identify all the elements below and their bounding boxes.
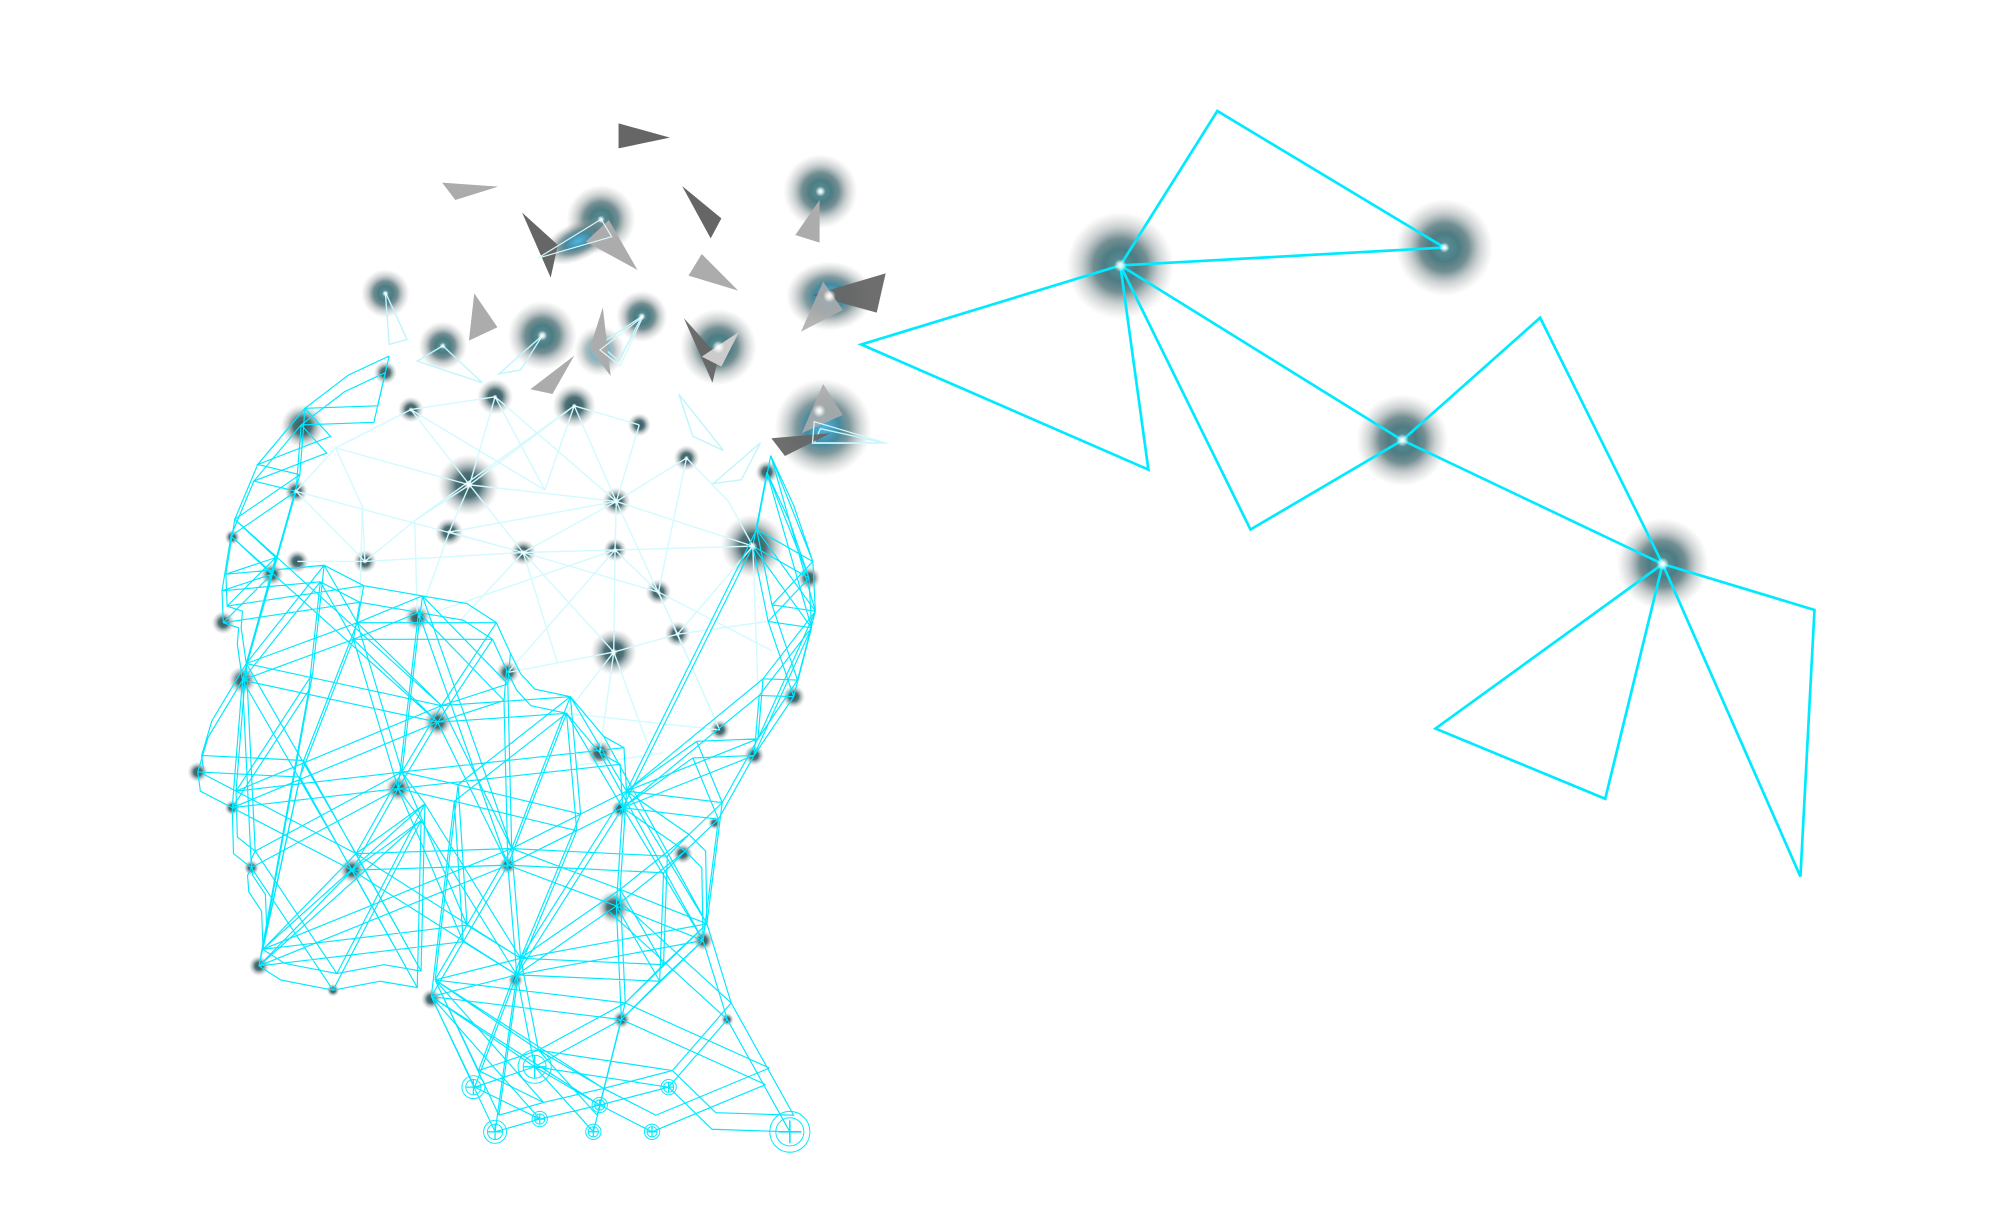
node sparks: [293, 394, 757, 656]
faint detached triangle outlines: [385, 292, 884, 484]
pale outlines over shards: [537, 219, 887, 443]
head wire mesh: upper copy: [202, 356, 815, 1115]
flying shards: [442, 123, 887, 456]
large glows above the head: [361, 154, 873, 476]
network triangles: [861, 111, 1814, 877]
head wire mesh: lower copy: [198, 373, 812, 1132]
glowing mesh nodes: [188, 361, 820, 1028]
screw rings along the neck: [462, 1050, 810, 1152]
network glows: [1067, 199, 1709, 610]
network sparks: [382, 186, 1669, 570]
network of triangles on the right: [382, 111, 1814, 877]
dark shards: [522, 123, 886, 456]
grey shards: [442, 183, 843, 433]
faint upper-skull mesh: [296, 397, 772, 766]
